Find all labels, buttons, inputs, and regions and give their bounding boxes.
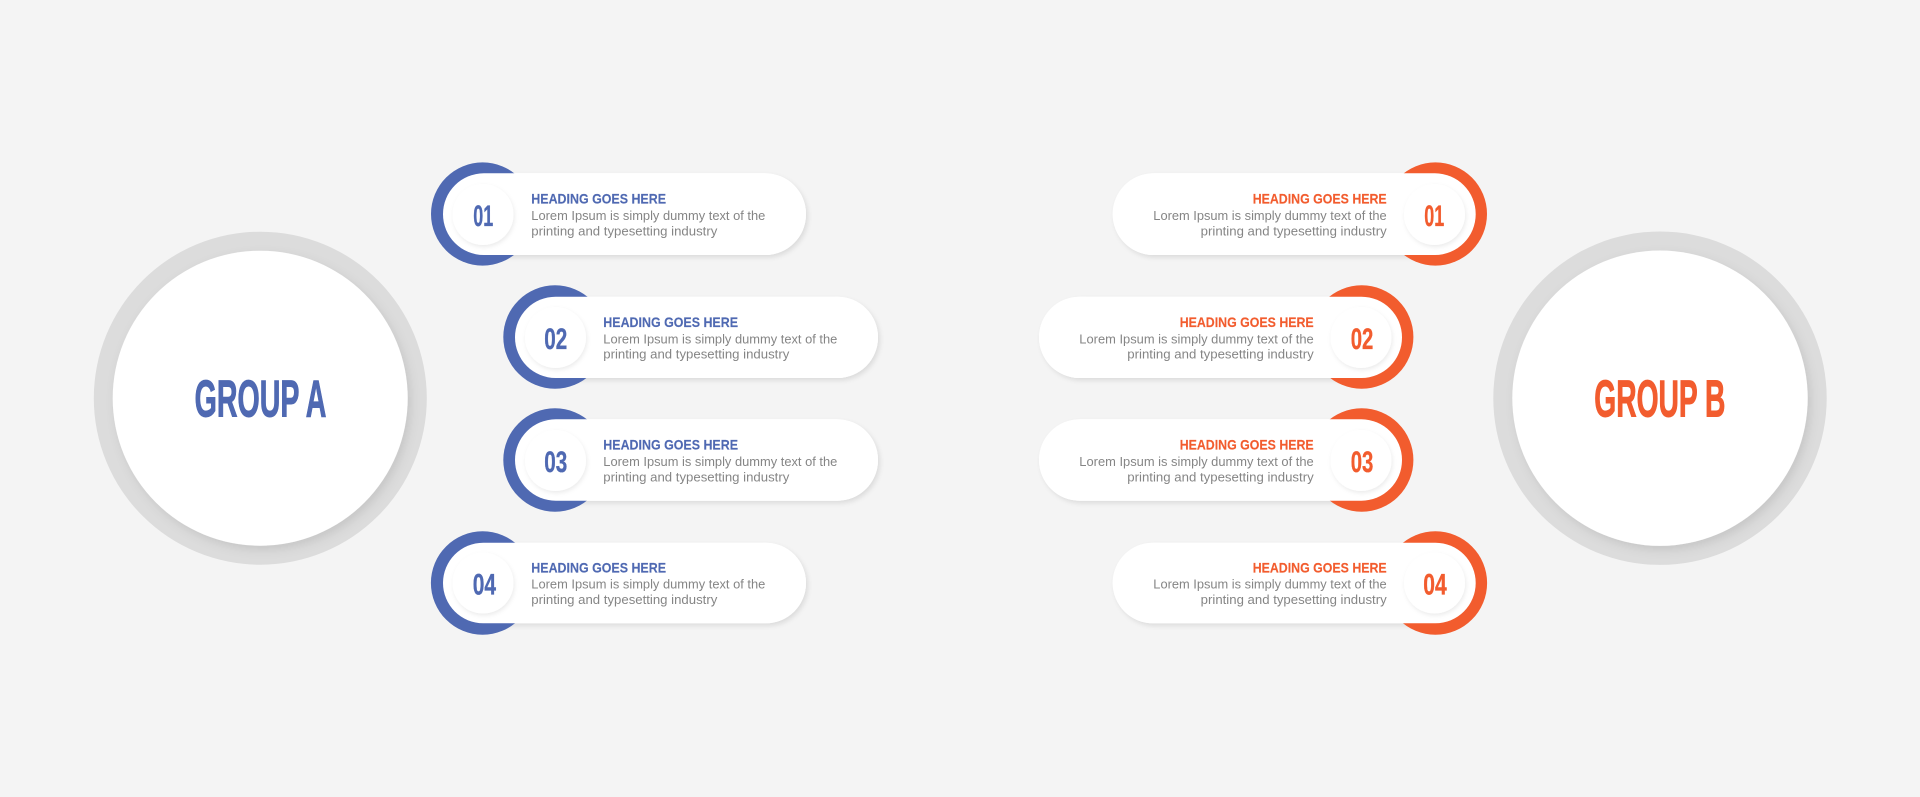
description 04: printing and typesetting industry [1201,592,1387,607]
ring accent 02 [1310,285,1413,389]
description 01: Lorem Ipsum is simply dummy text of the [1153,208,1387,223]
pill 01 [443,173,806,255]
heading 03: HEADING GOES HERE [1180,437,1314,453]
description 03: Lorem Ipsum is simply dummy text of the [1079,454,1314,469]
description 02: printing and typesetting industry [1127,347,1314,362]
number 04: 04 [1423,568,1447,601]
number badge 04 [1404,552,1465,614]
number badge 04 [452,552,514,614]
pill shadow 04 [443,543,806,623]
number 04: 04 [473,568,496,601]
number 03: 03 [544,446,567,479]
pill 03 [515,419,878,501]
description 03 [1079,454,1314,484]
number 02: 02 [1351,323,1373,356]
description 04 [531,577,765,607]
panel: group A item 03 [503,408,878,512]
description 02 [1079,331,1314,362]
heading 02: HEADING GOES HERE [603,314,738,330]
pill shadow 03 [515,419,878,501]
description 02: Lorem Ipsum is simply dummy text of the [603,331,837,346]
pill 02 [515,297,878,378]
description 04: printing and typesetting industry [531,592,718,607]
description 03: Lorem Ipsum is simply dummy text of the [603,454,837,469]
description 02: printing and typesetting industry [603,347,790,362]
panel: group A item 01 [431,162,806,266]
description 04: Lorem Ipsum is simply dummy text of the [531,577,765,592]
number badge 02 [1330,307,1392,368]
panel: group A item 02 [503,285,878,389]
ring accent 03 [1310,408,1413,512]
pill shadow 04 [1113,543,1476,623]
ring accent 01 [431,162,534,266]
pill shadow 02 [515,297,878,378]
group B title: GROUP B [1594,370,1725,428]
pill 01 [1113,173,1476,255]
description 01: Lorem Ipsum is simply dummy text of the [531,208,765,223]
number 02: 02 [544,323,567,356]
description 04 [1153,577,1387,607]
description 03: printing and typesetting industry [1127,469,1314,484]
panel: group A item 04 [431,531,806,635]
panel: group B item 01 [1113,162,1487,266]
ring accent 01 [1384,162,1487,266]
pill 04 [1113,543,1476,623]
panel: group A circle [94,232,427,565]
ring accent 02 [503,285,607,389]
heading 02: HEADING GOES HERE [1180,314,1314,330]
group B inner disc [1512,251,1808,546]
number badge 03 [1330,430,1392,491]
heading 04: HEADING GOES HERE [531,559,666,575]
description 04: Lorem Ipsum is simply dummy text of the [1153,577,1387,592]
number 03: 03 [1351,446,1373,479]
description 01: printing and typesetting industry [1201,223,1387,238]
panel: group B item 03 [1039,408,1413,512]
heading 01: HEADING GOES HERE [531,191,666,207]
ring accent 04 [1384,531,1487,635]
group A inner disc [113,251,408,546]
pill 02 [1039,297,1402,378]
pill 04 [443,543,806,623]
heading 01: HEADING GOES HERE [1253,191,1387,207]
panel: group B item 04 [1113,531,1487,635]
group B outer ring [1493,232,1827,565]
description 01 [531,208,765,238]
pill shadow 01 [1113,173,1476,255]
description 03: printing and typesetting industry [603,469,790,484]
description 01 [1153,208,1387,238]
number badge 01 [452,184,514,245]
pill 03 [1039,419,1402,501]
heading 04: HEADING GOES HERE [1253,559,1387,575]
number badge 01 [1404,184,1465,245]
number 01: 01 [1424,200,1444,233]
description 03 [603,454,837,484]
pill shadow 03 [1039,419,1402,501]
description 02: Lorem Ipsum is simply dummy text of the [1079,331,1314,346]
description 02 [603,331,837,362]
panel: group B item 02 [1039,285,1413,389]
heading 03: HEADING GOES HERE [603,437,738,453]
description 01: printing and typesetting industry [531,223,718,238]
ring accent 03 [503,408,607,512]
pill shadow 01 [443,173,806,255]
pill shadow 02 [1039,297,1402,378]
group A title: GROUP A [195,370,326,428]
number 01: 01 [473,200,493,233]
group A outer ring [94,232,427,565]
panel: group B circle [1493,232,1827,565]
number badge 03 [525,430,586,491]
ring accent 04 [431,531,534,635]
number badge 02 [525,307,586,368]
